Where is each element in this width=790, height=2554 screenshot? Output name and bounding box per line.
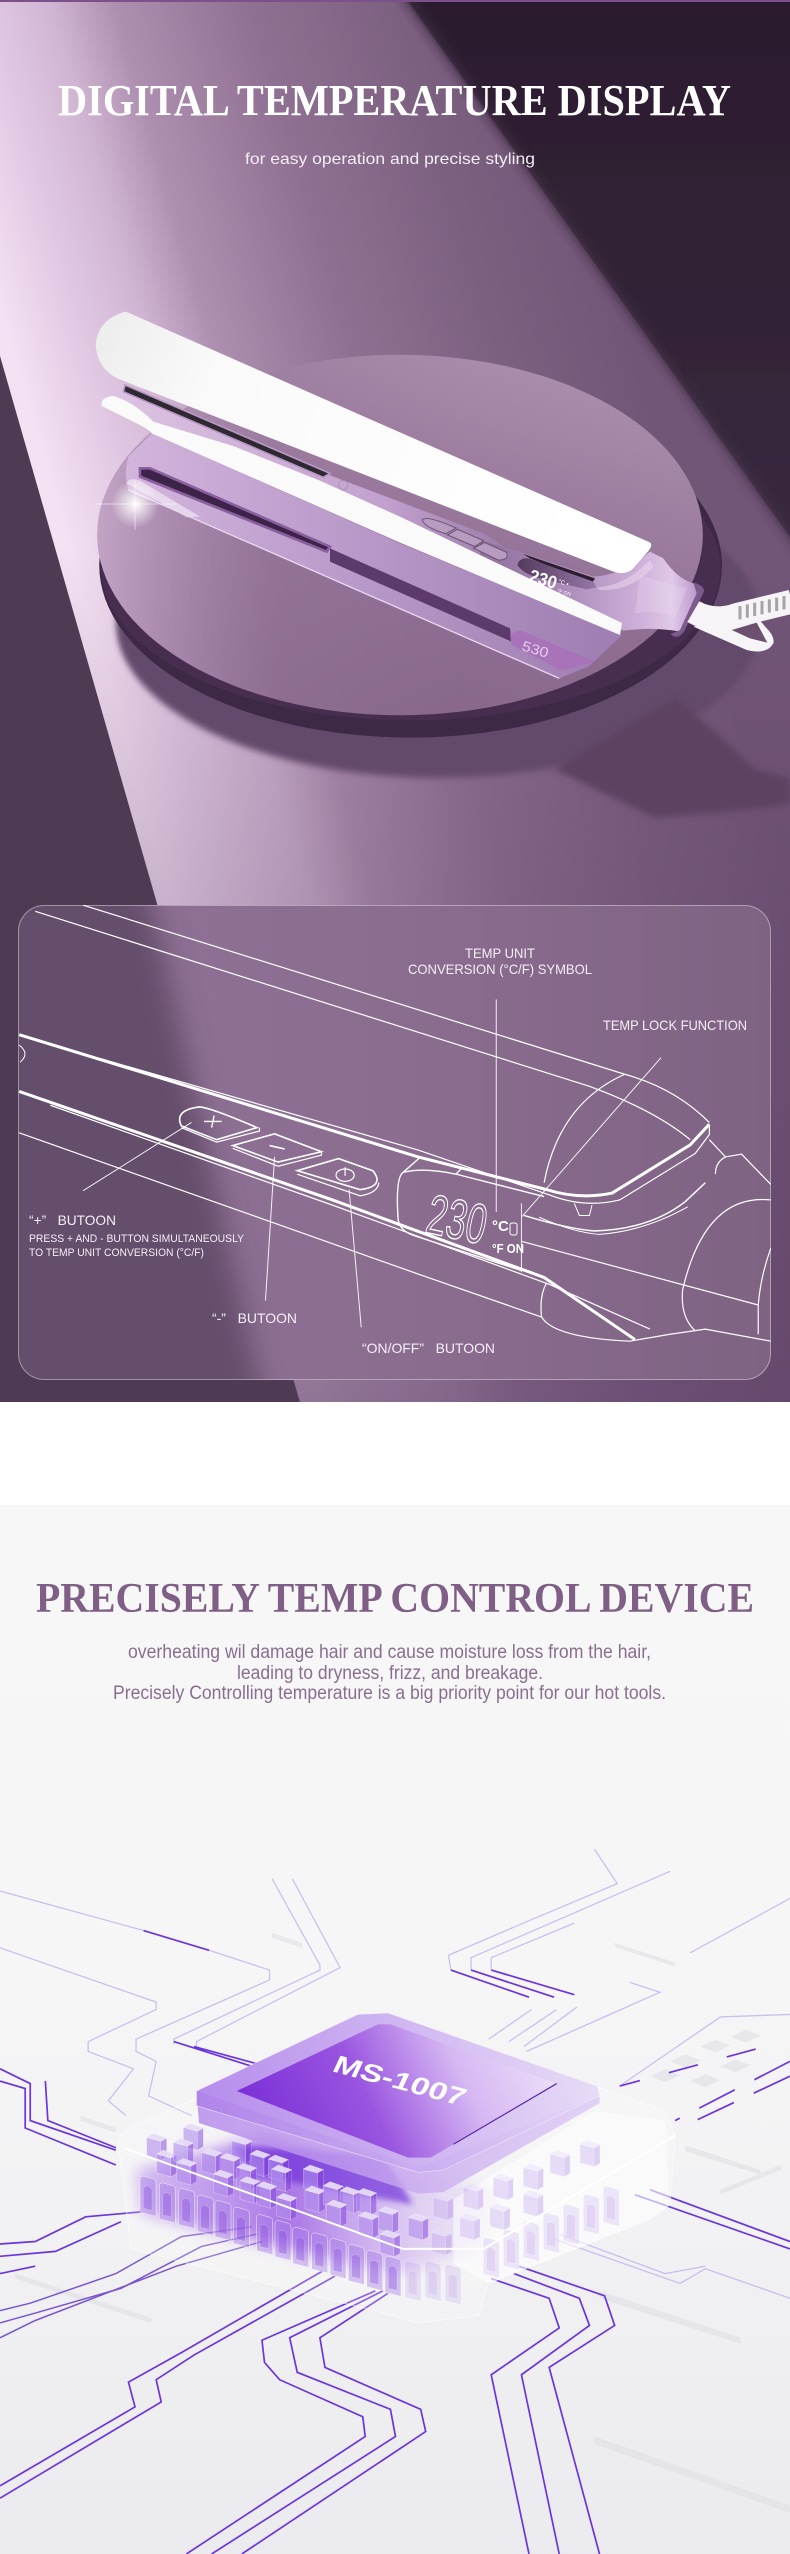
power button [297,1159,379,1196]
power cord [693,596,790,651]
line drawing of straightener [19,905,771,1341]
neck and collar [480,540,790,671]
lid top [196,2013,600,2172]
leader lines [83,1000,661,1327]
heading: PRECISELY TEMP CONTROL DEVICE [36,1576,754,1622]
disc right rim [101,416,720,720]
display symbols: °C ▪ [557,579,569,588]
internal pillars [140,2123,619,2305]
display fahrenheit symbols: °F ON [556,588,572,598]
product image: hair straightener on mirrored disc [95,312,790,818]
disc underside [99,393,722,738]
chip face [237,2024,557,2158]
label: conversion symbol: CONVERSION (°C/F) SYMBOL [408,961,592,977]
purple internal glow [136,2135,504,2274]
reflected digits: 530 [520,638,551,661]
diagram digits: 230 [422,1182,493,1256]
white lower arm [102,396,622,635]
title: digital temperature display: DIGITAL TEMPERATURE DISPLAY [58,76,731,125]
body text [113,1642,666,1704]
disc shadow on table [116,468,761,778]
label: plus button note line 2: TO TEMP UNIT CONVERSION (°C/F) [29,1247,204,1259]
label: on off button: “ON/OFF” BUTOON [362,1340,495,1356]
panel: precise temp control section [0,1505,790,2554]
subtitle: for easy operation and precise styling [245,151,535,168]
white gap [0,1402,790,1505]
chip label: MS-1007 [328,2051,471,2111]
faint board blocks [15,1933,790,2513]
minus button [233,1134,321,1166]
diagram celsius symbol: °C [492,1218,509,1235]
control buttons [422,519,507,560]
circuit traces: faint [0,1849,790,2298]
deep purple core [232,2145,413,2204]
label: temp unit: TEMP UNIT [465,945,535,961]
diagram fahrenheit symbol: °F ON [492,1241,524,1256]
upper arm group [96,312,651,573]
pale glass right side [453,2111,670,2283]
body text: Precisely Controlling temperature is a big priority point for our hot tools. [113,1683,666,1704]
lid side [196,2091,600,2194]
collar ring [671,583,704,637]
circuit traces: strong [0,1931,790,2554]
circuit traces: under glass [0,2227,262,2338]
panel: control diagram [0,850,790,2554]
temperature display panel [517,558,597,589]
display digits: 230 [527,566,559,593]
lower arm with plate [113,383,622,623]
glass base front edge [123,2135,675,2249]
diagram lock symbol [510,1223,517,1235]
body text: overheating wil damage hair and cause moisture loss from the hair, [128,1642,651,1663]
white upper arm [96,312,651,573]
straightener cast shadow [554,697,790,818]
label: temp lock: TEMP LOCK FUNCTION [603,1017,747,1033]
slit above display [523,554,595,583]
chip dark edge [453,2084,557,2144]
reflection of straightener [126,433,622,678]
plus button [180,1107,259,1142]
glass base [118,2086,675,2323]
sparkle [95,480,176,530]
reflected display panel [510,630,595,671]
label: plus button note line 1: PRESS + AND - BUTTON SIMULTANEOUSLY [29,1233,245,1245]
label: minus button: “-” BUTOON [212,1310,297,1326]
disc mirror surface [97,355,703,715]
body text: leading to dryness, frizz, and breakage. [237,1663,543,1684]
label: plus button: “+” BUTOON [29,1212,116,1228]
panel: hero background with light beam [0,0,790,1402]
chip illustration [0,1849,790,2554]
